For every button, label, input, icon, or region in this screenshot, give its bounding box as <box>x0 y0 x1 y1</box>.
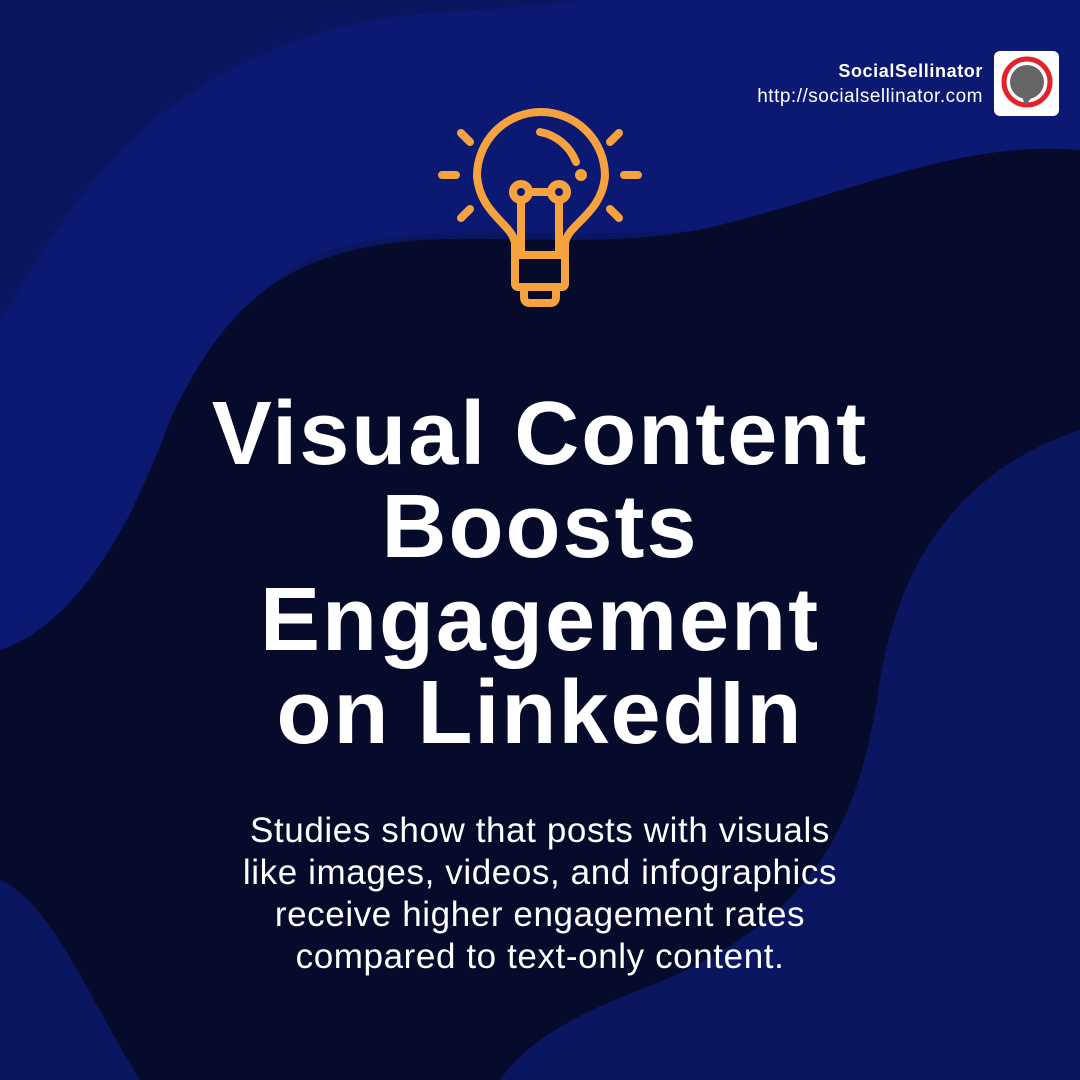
brand text <box>757 61 983 107</box>
brand text: http://socialsellinator.com <box>757 86 983 107</box>
logo <box>994 51 1059 116</box>
title: Boosts <box>381 477 699 577</box>
subtitle: compared to text-only content. <box>296 937 784 976</box>
title <box>212 384 868 763</box>
title: Engagement <box>260 570 820 670</box>
icon: light bulb <box>438 108 642 307</box>
title: on LinkedIn <box>276 663 803 763</box>
title: Visual Content <box>212 384 868 484</box>
subtitle: like images, videos, and infographics <box>243 853 837 892</box>
subtitle: receive higher engagement rates <box>275 895 805 934</box>
subtitle: Studies show that posts with visuals <box>250 811 830 850</box>
subtitle <box>243 811 837 976</box>
brand text: SocialSellinator <box>838 61 983 81</box>
